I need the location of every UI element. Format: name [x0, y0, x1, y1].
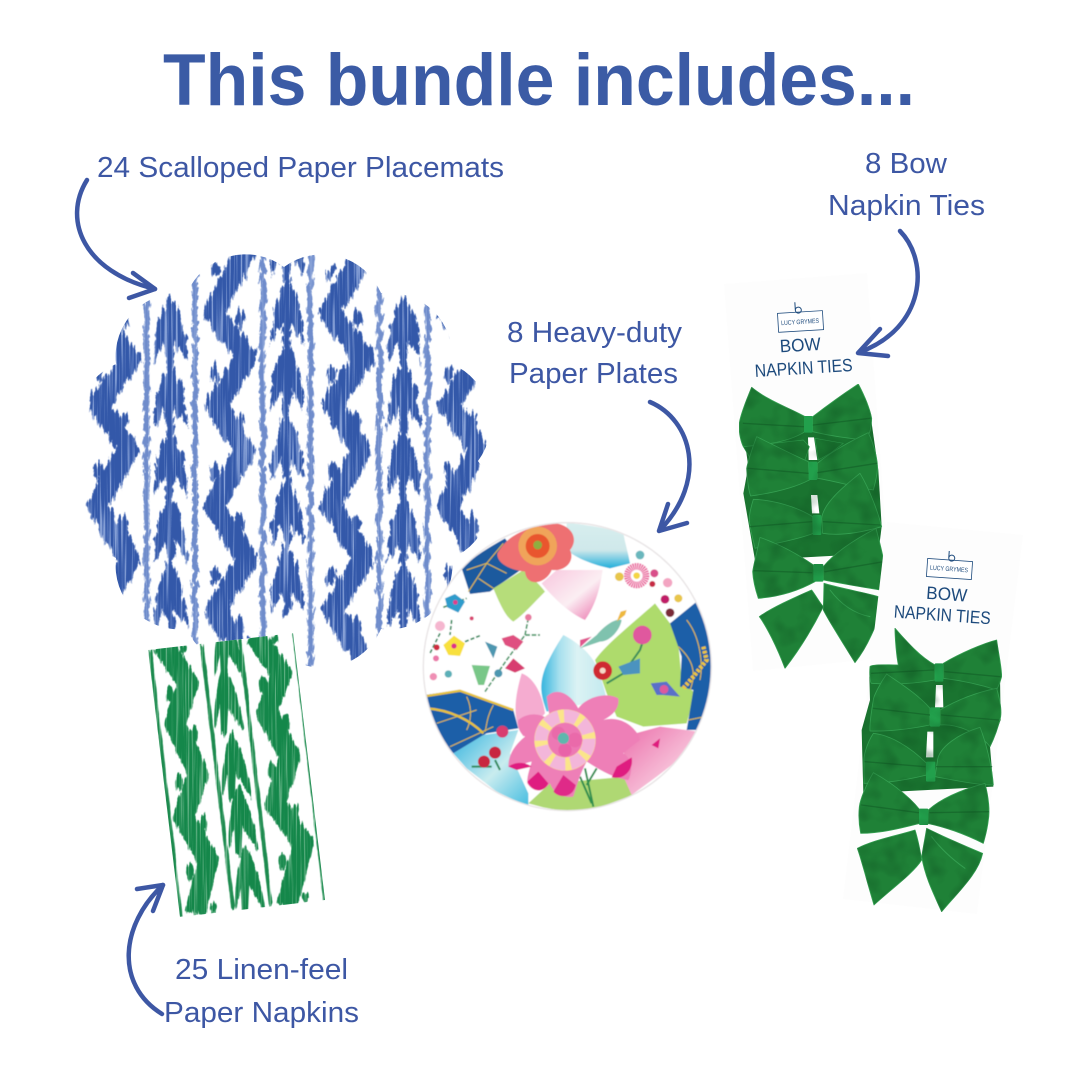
arrow: to placemats: [77, 180, 155, 298]
arrow: to plate: [650, 402, 689, 531]
top pink leaf: [542, 570, 603, 620]
arrow: to bow ties: [858, 231, 918, 356]
logo 1: [777, 301, 824, 332]
pack title 2: NAPKIN TIES: [893, 602, 991, 628]
bird: [580, 610, 627, 648]
pack title 1: BOW: [779, 334, 821, 356]
top left dark blue leaf: [462, 538, 525, 594]
label: bow ties: 8 Bow: [865, 148, 948, 180]
panel: scalloped placemat: [94, 210, 483, 683]
panel: floral paper plate: [423, 523, 712, 812]
logo 1: LUCY GRYMES: [781, 318, 820, 327]
lower left flowers: [472, 726, 508, 770]
right green leaf: [595, 603, 695, 727]
label: plates: [507, 317, 683, 390]
card 1: [724, 273, 895, 671]
logo 2: LUCY GRYMES: [930, 565, 969, 574]
top teal leaf: [567, 523, 630, 568]
label: plates: Paper Plates: [509, 358, 678, 390]
logo 2: [926, 550, 973, 580]
label: bow ties: [828, 148, 985, 222]
pack title 2: BOW: [926, 583, 968, 606]
pack title 1: [753, 332, 853, 381]
flowers on green leaf: [593, 626, 680, 697]
label: napkins: Paper Napkins: [164, 997, 359, 1029]
label: bow ties: Napkin Ties: [828, 190, 985, 222]
lower left dark blue leaf: [425, 690, 518, 753]
bows pack 1: [739, 384, 885, 668]
panel: bow napkin ties pack 2: [843, 522, 1023, 914]
center blue leaf: [541, 635, 607, 712]
lower green leaf: [528, 777, 633, 812]
top left green leaf: [493, 570, 545, 622]
right dark blue leaf: [670, 602, 712, 730]
panel: bow napkin ties pack 1: [724, 273, 895, 671]
center sprig: [472, 614, 540, 692]
left sprig flowers: [430, 594, 482, 680]
panel: green napkin: [148, 610, 325, 917]
lower blue leaf: [453, 730, 528, 807]
label: napkins: [164, 954, 359, 1029]
title: This bundle includes...: [163, 40, 915, 121]
label: napkins: 25 Linen-feel: [175, 954, 348, 986]
coral flower: [497, 523, 574, 582]
big pink flower: [508, 692, 640, 807]
label: plates: 8 Heavy-duty: [507, 317, 683, 349]
top right sprig: [615, 551, 682, 617]
lower right pink leaf: [623, 727, 698, 795]
left pink leaf: [515, 673, 545, 737]
pack title 2: [893, 581, 993, 628]
card 2: [843, 522, 1023, 914]
pack title 1: NAPKIN TIES: [754, 355, 853, 381]
arrow: to napkins: [129, 885, 163, 1014]
label: placemats: 24 Scalloped Paper Placemats: [97, 152, 504, 184]
bows pack 2: [857, 628, 1002, 912]
